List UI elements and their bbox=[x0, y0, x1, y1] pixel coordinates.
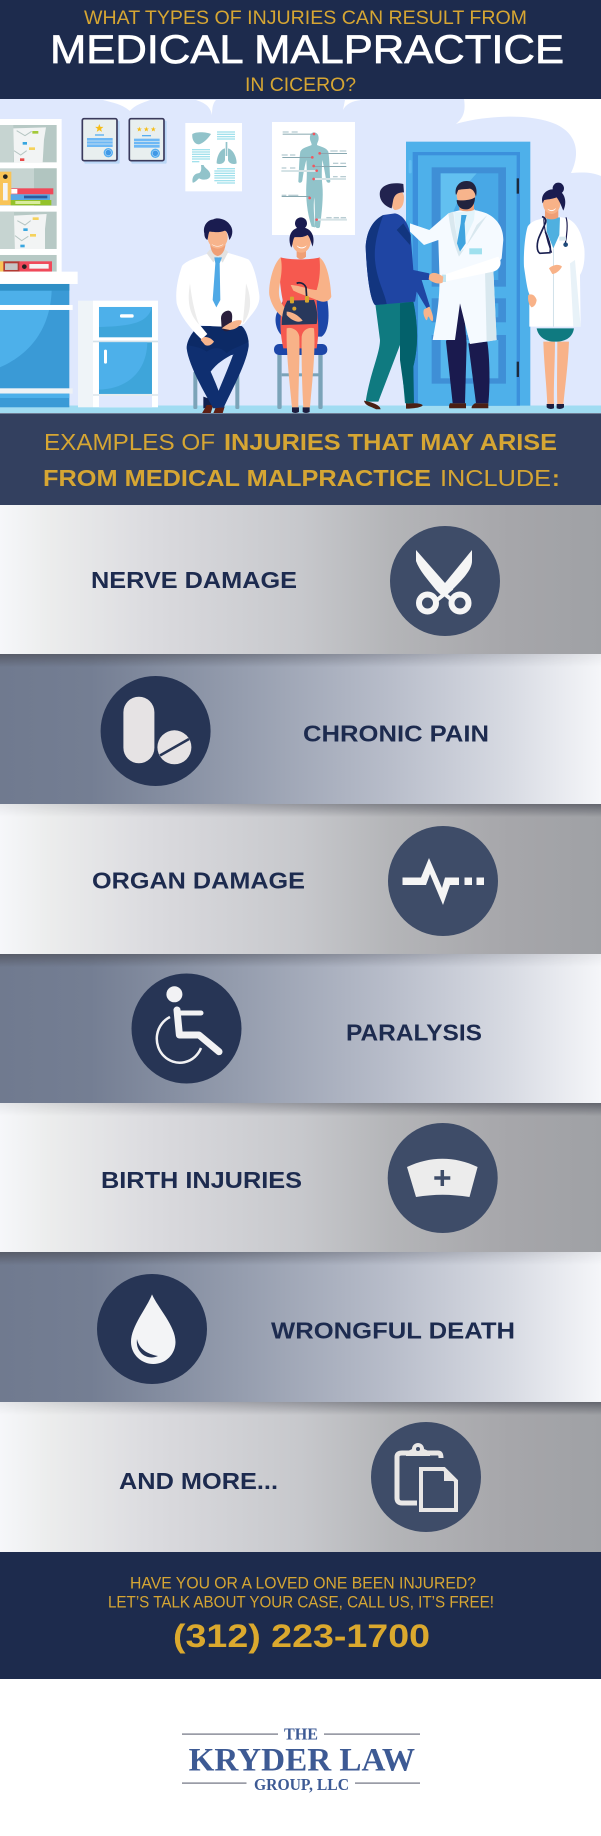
panel: nerve damage bbox=[0, 505, 601, 654]
examples band heading: : bbox=[552, 465, 560, 491]
phone number: (312) 223-1700 bbox=[173, 1618, 430, 1654]
left furniture: shelves and cabinets bbox=[0, 119, 167, 407]
call to action footer bbox=[0, 1552, 601, 1679]
anatomy posters bbox=[185, 122, 355, 235]
logo: The Kryder Law Group bbox=[182, 1724, 420, 1794]
call to action footer: LET’S TALK ABOUT YOUR CASE, CALL US, IT’S FREE! bbox=[108, 1594, 494, 1612]
figure: seated man bbox=[176, 218, 259, 413]
heading line 3: IN CICERO? bbox=[245, 75, 356, 96]
door bbox=[406, 142, 530, 406]
icon: drop bbox=[97, 1274, 207, 1384]
icon: wheelchair bbox=[132, 974, 242, 1084]
examples band heading bbox=[0, 413, 601, 505]
figure: nurse bbox=[524, 183, 585, 409]
icon: scissors bbox=[390, 526, 500, 636]
examples band heading: FROM MEDICAL MALPRACTICE bbox=[43, 465, 431, 491]
heading line 1: WHAT TYPES OF INJURIES CAN RESULT FROM bbox=[84, 8, 527, 29]
panel: paralysis bbox=[0, 954, 601, 1103]
figure: seated woman bbox=[269, 217, 331, 413]
logo: The Kryder Law Group: THE bbox=[284, 1724, 318, 1744]
panel: organ damage bbox=[0, 804, 601, 954]
icon: nurse cap bbox=[388, 1123, 498, 1233]
label: ORGAN DAMAGE bbox=[92, 868, 305, 894]
figure: patient in blue jacket shaking hands bbox=[364, 183, 433, 409]
white cloud background cut-outs bbox=[103, 99, 601, 176]
examples band heading: EXAMPLES OF bbox=[44, 429, 215, 455]
label: CHRONIC PAIN bbox=[303, 720, 489, 746]
main title: MEDICAL MALPRACTICE bbox=[50, 28, 564, 72]
panel: chronic pain bbox=[0, 654, 601, 804]
icon: clipboard bbox=[371, 1422, 481, 1532]
header panel bbox=[0, 0, 601, 99]
framed certificates bbox=[82, 119, 167, 164]
panel: wrongful death bbox=[0, 1252, 601, 1402]
floor bbox=[0, 406, 601, 414]
logo: The Kryder Law Group: KRYDER LAW bbox=[189, 1742, 415, 1778]
label: PARALYSIS bbox=[346, 1020, 482, 1046]
call to action footer: HAVE YOU OR A LOVED ONE BEEN INJURED? bbox=[130, 1575, 476, 1593]
label: WRONGFUL DEATH bbox=[271, 1318, 515, 1344]
label: BIRTH INJURIES bbox=[101, 1167, 302, 1193]
icon: pills bbox=[101, 676, 211, 786]
figure: doctor bbox=[410, 181, 503, 408]
logo: The Kryder Law Group: GROUP, LLC bbox=[254, 1775, 349, 1794]
icon: heartbeat bbox=[388, 826, 498, 936]
panel: birth injuries bbox=[0, 1103, 601, 1252]
label: NERVE DAMAGE bbox=[91, 567, 297, 593]
examples band heading: INJURIES THAT MAY ARISE bbox=[224, 429, 557, 455]
illustration: clinic waiting room bbox=[0, 99, 601, 414]
label: AND MORE... bbox=[119, 1468, 278, 1494]
examples band heading: INCLUDE bbox=[440, 465, 551, 491]
panel: and more bbox=[0, 1402, 601, 1552]
